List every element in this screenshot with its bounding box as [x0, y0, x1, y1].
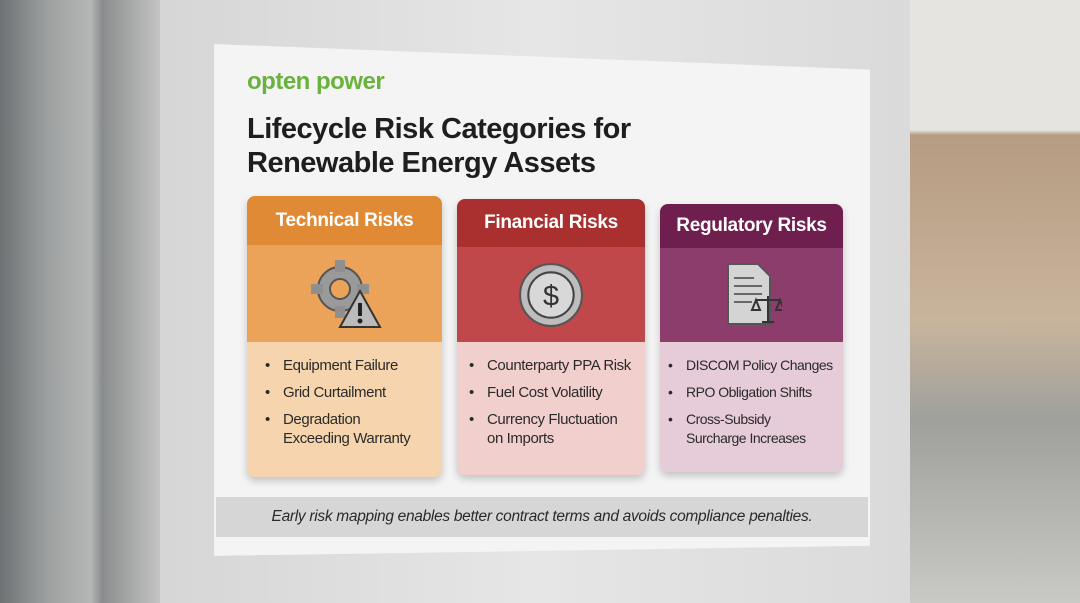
- icon: dollar coin: [457, 247, 645, 342]
- header: Financial Risks: [484, 212, 618, 233]
- background: wall: [160, 0, 912, 603]
- list: Grid Curtailment: [283, 384, 386, 401]
- icon: dollar coin: $: [543, 280, 559, 312]
- title: [247, 113, 631, 179]
- list: Degradation: [283, 411, 360, 428]
- list: Exceeding Warranty: [283, 430, 410, 447]
- background: right office: [910, 0, 1080, 603]
- list: [668, 357, 833, 446]
- logo: opten power: [247, 68, 384, 95]
- panel: regulatory: [660, 204, 843, 472]
- poster: [214, 44, 870, 556]
- list: [470, 357, 632, 447]
- header: Regulatory Risks: [676, 215, 827, 236]
- list: Equipment Failure: [283, 357, 398, 374]
- icon: document with scale: [660, 248, 843, 342]
- title: Renewable Energy Assets: [247, 147, 595, 179]
- header: Technical Risks: [276, 210, 413, 230]
- list: Counterparty PPA Risk: [487, 357, 631, 374]
- list: Fuel Cost Volatility: [487, 384, 602, 401]
- background: left office: [0, 0, 165, 603]
- footer callout: Early risk mapping enables better contract terms and avoids compliance penalties.: [272, 508, 812, 525]
- list: [266, 357, 411, 447]
- list: DISCOM Policy Changes: [686, 357, 833, 373]
- list: Cross-Subsidy: [686, 411, 771, 427]
- footer callout: [216, 497, 868, 537]
- header: [247, 196, 442, 245]
- list: Surcharge Increases: [686, 430, 806, 446]
- list: on Imports: [487, 430, 554, 447]
- panel: financial: [457, 199, 645, 475]
- list: Currency Fluctuation: [487, 411, 617, 428]
- header: [660, 204, 843, 248]
- icon: gear with warning: [247, 245, 442, 342]
- list: RPO Obligation Shifts: [686, 384, 812, 400]
- header: [457, 199, 645, 247]
- title: Lifecycle Risk Categories for: [247, 113, 631, 145]
- panel: technical: [247, 196, 442, 477]
